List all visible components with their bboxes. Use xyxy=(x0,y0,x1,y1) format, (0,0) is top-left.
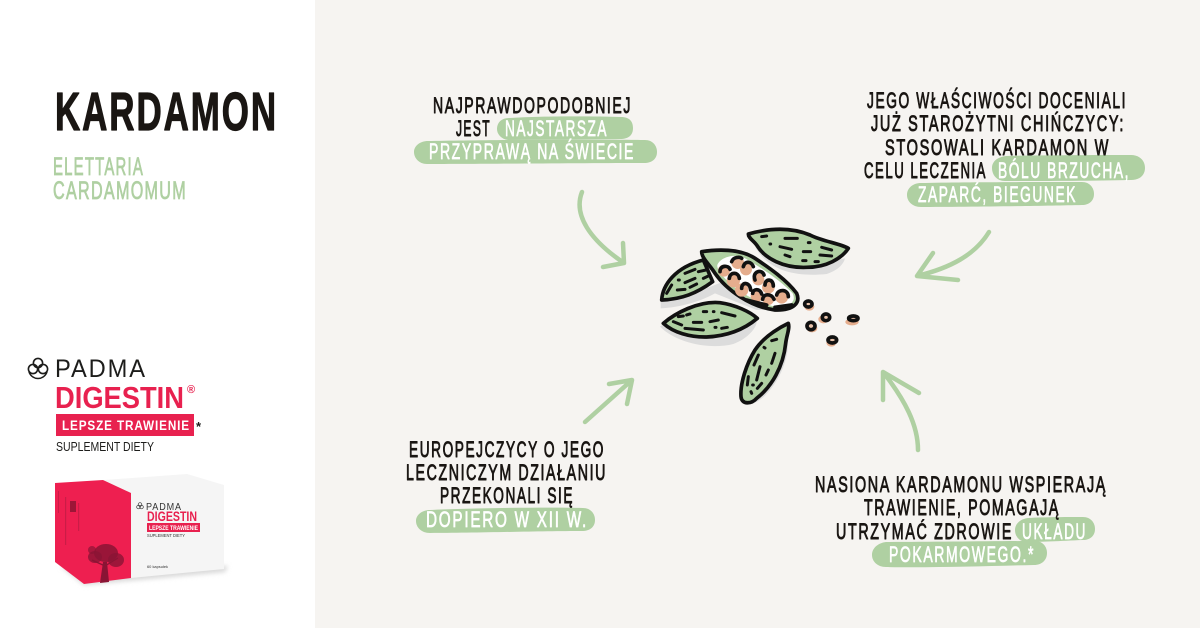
claim text: LEPSZE TRAWIENIE xyxy=(62,418,190,433)
box logo: SUPLEMENT DIETY xyxy=(147,533,185,538)
pod: open with seeds xyxy=(702,250,798,310)
registered mark: ® xyxy=(187,384,195,396)
box side face xyxy=(55,480,131,584)
callout text: CELU LECZENIA xyxy=(864,158,987,183)
callout text xyxy=(864,88,1130,207)
callout text: EUROPEJCZYCY O JEGO xyxy=(409,437,605,462)
callout text: TRAWIENIE, POMAGAJĄ xyxy=(864,495,1060,520)
callout text xyxy=(815,472,1107,567)
callout: Europeans xyxy=(406,437,607,533)
highlight pills xyxy=(872,517,1095,567)
pod: upper right xyxy=(748,229,848,267)
callout text: NAJSTARSZA xyxy=(505,116,608,141)
seed arcs xyxy=(720,257,792,307)
pod: left xyxy=(662,260,713,300)
panel: left sidebar xyxy=(0,0,315,628)
callout text: UTRZYMAĆ ZDROWIE xyxy=(836,519,1013,544)
product name: DIGESTIN xyxy=(55,380,184,415)
claim banner xyxy=(56,414,194,436)
subtitle: latin name: CARDAMOMUM xyxy=(53,177,187,205)
callout text: DOPIERO W XII W. xyxy=(426,507,588,532)
callout: ancient Chinese xyxy=(864,88,1145,207)
arrow: bottom left xyxy=(585,380,632,422)
callout text: LECZNICZYM DZIAŁANIU xyxy=(406,460,607,485)
arrow: top right xyxy=(917,232,989,280)
callout: seeds support digestion xyxy=(815,472,1107,567)
arrow: bottom right xyxy=(883,372,919,450)
seed flesh xyxy=(718,256,788,305)
illustration: cardamom pods and seeds xyxy=(660,229,859,405)
callout text: POKARMOWEGO.* xyxy=(889,542,1035,567)
logo: Padma Digestin xyxy=(28,355,202,454)
product box xyxy=(55,474,228,585)
pod interior xyxy=(717,256,794,307)
seeds xyxy=(804,301,859,347)
box logo: DIGESTIN xyxy=(147,508,197,524)
title: KARDAMON xyxy=(55,82,278,142)
icon: padma symbol xyxy=(28,358,48,378)
callout text xyxy=(406,437,607,532)
side print xyxy=(58,491,79,545)
callout text: JEST xyxy=(456,116,491,141)
pod: bottom xyxy=(741,323,789,403)
highlight pills xyxy=(414,116,657,164)
pod shadows xyxy=(660,247,845,405)
callout text: NAJPRAWDOPODOBNIEJ xyxy=(433,93,632,118)
pod: lower left xyxy=(663,302,757,337)
box shadow xyxy=(60,566,228,585)
callout text: PRZYPRAWĄ NA ŚWIECIE xyxy=(429,139,635,164)
tree illustration xyxy=(88,544,124,583)
callout text: UKŁADU xyxy=(1022,519,1087,544)
subtitle: latin name xyxy=(53,153,187,205)
subtitle: latin name: ELETTARIA xyxy=(53,153,144,181)
callout text: PRZEKONALI SIĘ xyxy=(440,483,574,508)
callout text: ZAPARĆ, BIEGUNEK xyxy=(918,182,1077,207)
callout text xyxy=(429,93,635,164)
arrow: top left xyxy=(580,192,624,267)
box logo xyxy=(137,502,200,569)
box logo: PADMA xyxy=(146,502,182,513)
highlight pills xyxy=(907,155,1145,207)
brand name: PADMA xyxy=(55,355,147,383)
box logo: 60 kapsułek xyxy=(147,564,168,569)
highlight pill xyxy=(416,508,595,533)
callout: oldest spice xyxy=(414,93,657,164)
box logo: LEPSZE TRAWIENIE xyxy=(149,525,199,532)
supplement label: SUPLEMENT DIETY xyxy=(56,440,155,454)
box front face xyxy=(104,474,224,578)
asterisk: * xyxy=(196,419,202,434)
